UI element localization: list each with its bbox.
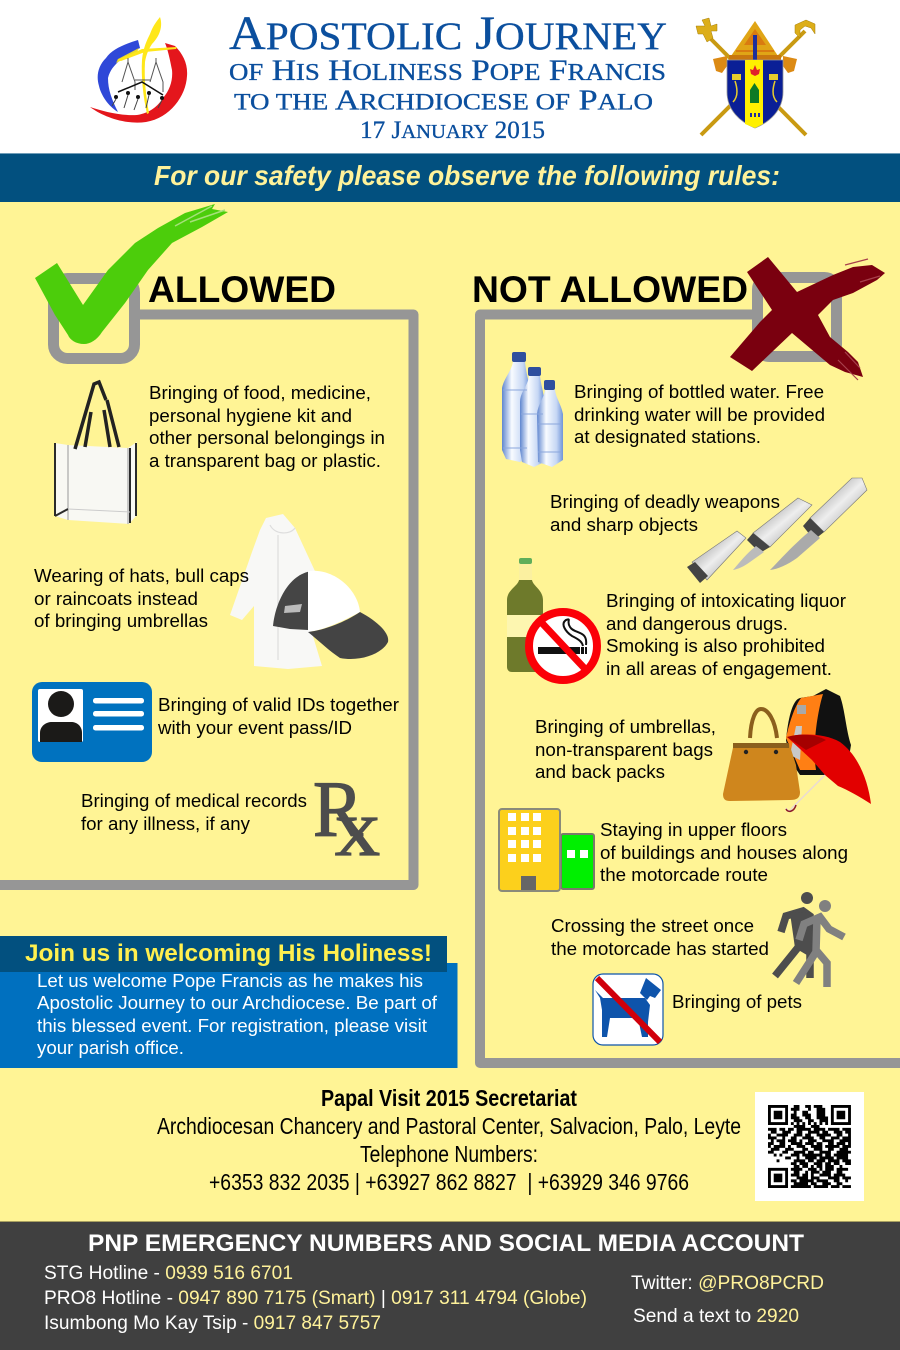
join body text: Apostolic Journey to our Archdiocese. Be part of bbox=[37, 992, 438, 1013]
social media bbox=[631, 1272, 824, 1327]
text: liquor and smoking: and dangerous drugs. bbox=[606, 613, 788, 634]
item: raincoat and cap icon bbox=[230, 514, 388, 669]
text: weapons: Bringing of deadly weapons bbox=[550, 491, 780, 512]
social media: Send a text to 2920 bbox=[633, 1305, 799, 1327]
text: valid IDs: with your event pass/ID bbox=[157, 717, 352, 738]
text: valid IDs bbox=[157, 694, 399, 738]
text: medical records bbox=[81, 790, 307, 834]
text: hats and raincoats: of bringing umbrellas bbox=[34, 610, 208, 631]
hotlines bbox=[44, 1262, 587, 1334]
join body text: your parish office. bbox=[37, 1037, 184, 1058]
QR code bbox=[755, 1092, 864, 1201]
text: liquor and smoking bbox=[606, 590, 846, 679]
icon: Rx symbol: R bbox=[313, 767, 363, 854]
text: upper floors bbox=[600, 819, 848, 885]
text: umbrellas and bags: and back packs bbox=[535, 761, 665, 782]
text: liquor and smoking: Bringing of intoxicating liquor bbox=[606, 590, 846, 611]
icon: Rx symbol: x bbox=[335, 785, 380, 873]
footer heading: PNP EMERGENCY NUMBERS AND SOCIAL MEDIA ACCOUNT bbox=[88, 1230, 804, 1257]
text: food and belongings: a transparent bag or plastic. bbox=[149, 450, 381, 471]
text: bottled water: Bringing of bottled water. Free bbox=[574, 381, 824, 402]
hotlines: Isumbong Mo Kay Tsip - 0917 847 5757 bbox=[44, 1312, 381, 1334]
text: medical records: Bringing of medical records bbox=[81, 790, 307, 811]
title bbox=[229, 7, 667, 144]
text: medical records: for any illness, if any bbox=[81, 813, 251, 834]
text: crossing the street: the motorcade has started bbox=[551, 938, 769, 959]
text: liquor and smoking: Smoking is also prohibited bbox=[606, 635, 825, 656]
social media: Twitter: @PRO8PCRD bbox=[631, 1272, 824, 1294]
text: weapons: and sharp objects bbox=[550, 514, 698, 535]
icon: ID card bbox=[32, 682, 152, 762]
not allowed frame bbox=[480, 314, 900, 1063]
secretariat contact text: +6353 832 2035 | +63927 862 8827 | +63929 346 9766 bbox=[209, 1169, 689, 1195]
text: upper floors: Staying in upper floors bbox=[600, 819, 787, 840]
banner: For our safety please observe the following rules: bbox=[154, 160, 780, 191]
banner bbox=[0, 153, 900, 202]
text: pets: Bringing of pets bbox=[672, 991, 802, 1012]
join body text: this blessed event. For registration, please visit bbox=[37, 1015, 428, 1036]
join heading: Join us in welcoming His Holiness! bbox=[25, 940, 432, 967]
text: food and belongings: personal hygiene kit and bbox=[149, 405, 352, 426]
icon: knives bbox=[687, 478, 867, 583]
logo: papal visit emblem bbox=[90, 17, 187, 123]
text: hats and raincoats bbox=[34, 565, 249, 631]
text: upper floors: the motorcade route bbox=[600, 864, 768, 885]
text: food and belongings: Bringing of food, medicine, bbox=[149, 382, 371, 403]
icon: no pets sign bbox=[593, 974, 663, 1045]
text: crossing the street bbox=[551, 915, 769, 959]
text: hats and raincoats: Wearing of hats, bull caps bbox=[34, 565, 249, 586]
join body text bbox=[37, 970, 438, 1058]
icon: pedestrians bbox=[775, 892, 844, 987]
icon: handbag, backpack and umbrella bbox=[723, 689, 871, 811]
panel: not allowed bbox=[472, 257, 900, 1063]
hotlines: STG Hotline - 0939 516 6701 bbox=[44, 1262, 293, 1284]
text: weapons bbox=[550, 491, 780, 535]
secretariat contact text: Archdiocesan Chancery and Pastoral Center, Salvacion, Palo, Leyte bbox=[157, 1113, 741, 1139]
hotlines: PRO8 Hotline - 0947 890 7175 (Smart) | 0917 311 4794 (Globe) bbox=[44, 1287, 587, 1309]
secretariat contact text: Papal Visit 2015 Secretariat bbox=[321, 1085, 577, 1111]
coat of arms bbox=[696, 18, 815, 135]
text: liquor and smoking: in all areas of engagement. bbox=[606, 658, 832, 679]
text: bottled water: at designated stations. bbox=[574, 426, 761, 447]
icon: Rx symbol bbox=[313, 767, 380, 873]
text: hats and raincoats: or raincoats instead bbox=[34, 588, 198, 609]
text: bottled water: drinking water will be provided bbox=[574, 404, 825, 425]
text: food and belongings bbox=[149, 382, 385, 471]
text: valid IDs: Bringing of valid IDs together bbox=[158, 694, 399, 715]
text: upper floors: of buildings and houses along bbox=[600, 842, 848, 863]
item: transparent bag icon bbox=[55, 382, 137, 524]
icon: green check in box bbox=[35, 204, 228, 358]
icon: liquor bottle and no smoking sign bbox=[507, 558, 597, 680]
text: crossing the street: Crossing the street once bbox=[551, 915, 754, 936]
title: OF HIS HOLINESS POPE FRANCIS bbox=[229, 54, 666, 87]
icon: buildings bbox=[499, 809, 594, 891]
text: umbrellas and bags: non-transparent bags bbox=[535, 739, 713, 760]
panel: join us bbox=[0, 936, 458, 1068]
secretariat contact text: Telephone Numbers: bbox=[360, 1141, 538, 1167]
heading: allowed: ALLOWED bbox=[148, 269, 336, 310]
text: bottled water bbox=[574, 381, 825, 447]
allowed frame bbox=[0, 314, 414, 885]
text: umbrellas and bags: Bringing of umbrellas, bbox=[535, 716, 716, 737]
title: APOSTOLIC JOURNEY bbox=[229, 7, 667, 60]
icon: water bottles bbox=[502, 352, 563, 467]
title: TO THE ARCHDIOCESE OF PALO bbox=[234, 84, 653, 116]
title: 17 JANUARY 2015 bbox=[360, 117, 545, 144]
heading: not allowed: NOT ALLOWED bbox=[472, 269, 748, 310]
panel: allowed bbox=[0, 204, 414, 885]
secretariat contact text bbox=[157, 1085, 741, 1195]
icon: red cross in box bbox=[730, 257, 885, 380]
text: food and belongings: other personal belongings in bbox=[149, 427, 385, 448]
footer: emergency numbers bbox=[0, 1221, 900, 1350]
join body text: Let us welcome Pope Francis as he makes his bbox=[37, 970, 423, 991]
text: umbrellas and bags bbox=[535, 716, 716, 782]
